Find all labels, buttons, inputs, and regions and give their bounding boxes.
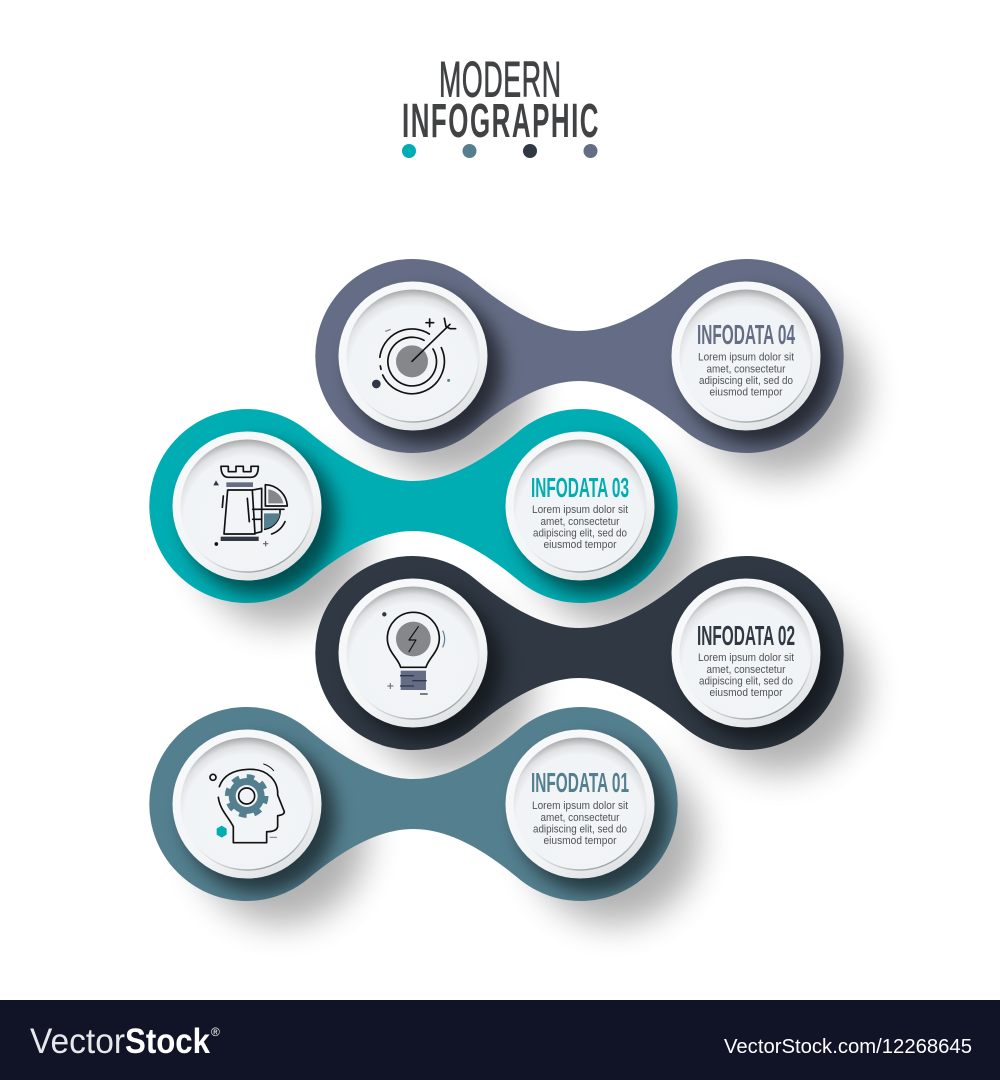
title: INFOGRAPHIC [402, 95, 600, 148]
panel: infodata 02 [315, 556, 844, 750]
text: infodata 04 [697, 319, 795, 398]
text: infodata 04: amet, consectetur [706, 364, 786, 376]
icon: chess rook and pie chart [213, 466, 287, 546]
band 04 [315, 259, 844, 453]
band 03 [149, 409, 678, 603]
left disc 01 [172, 730, 322, 878]
band 03 circle shadows [184, 443, 669, 595]
text: infodata 01 [531, 767, 629, 847]
footer logo: ® [211, 1025, 220, 1039]
text: infodata 03: amet, consectetur [540, 516, 620, 528]
title: MODERN [439, 53, 562, 108]
legend dots [402, 144, 598, 158]
text: infodata 04: Lorem ipsum dolor sit [698, 352, 794, 364]
left disc 03 [172, 432, 322, 580]
panel: infodata 03 [149, 409, 678, 603]
text: infodata 02 [697, 620, 795, 699]
left disc 04 [338, 282, 488, 430]
cast shadows on the background [195, 304, 866, 924]
icon: head with gear [210, 764, 284, 843]
right disc 04 [672, 282, 820, 430]
band 04 circle shadows [350, 293, 835, 445]
right disc 02 [672, 578, 820, 728]
band 02 circle shadows [350, 590, 835, 742]
text: infodata 04: INFODATA 04 [697, 319, 795, 350]
text: infodata 04: eiusmod tempor [710, 386, 783, 398]
text: infodata 03: eiusmod tempor [544, 539, 617, 551]
text: infodata 03: INFODATA 03 [531, 472, 629, 503]
text: infodata 03: Lorem ipsum dolor sit [532, 504, 628, 516]
footer logo [30, 1022, 220, 1061]
icon: target with arrow [372, 318, 456, 394]
right disc 03 [506, 432, 654, 580]
left disc 02 [338, 578, 488, 728]
footer logo: Vector [30, 1022, 125, 1061]
footer bar [0, 1000, 1000, 1080]
footer image id: VectorStock.com/12268645 [724, 1036, 972, 1058]
text: infodata 01: eiusmod tempor [544, 835, 617, 847]
text: infodata 02: INFODATA 02 [697, 620, 795, 651]
text: infodata 01: amet, consectetur [540, 812, 620, 824]
band 02 [315, 556, 844, 750]
text: infodata 01: Lorem ipsum dolor sit [532, 800, 628, 812]
icon: light bulb [382, 612, 445, 694]
text: infodata 02: eiusmod tempor [710, 687, 783, 699]
text: infodata 02: adipiscing elit, sed do [699, 676, 793, 688]
panel: infodata 04 [315, 259, 844, 453]
right disc 01 [506, 730, 654, 878]
text: infodata 02: amet, consectetur [706, 664, 786, 676]
text: infodata 01: adipiscing elit, sed do [533, 824, 627, 836]
panel: infodata 01 [149, 707, 678, 901]
text: infodata 03 [531, 472, 629, 551]
text: infodata 03: adipiscing elit, sed do [533, 528, 627, 540]
text: infodata 01: INFODATA 01 [531, 767, 629, 798]
title [402, 53, 600, 148]
band 01 [149, 707, 678, 901]
text: infodata 02: Lorem ipsum dolor sit [698, 652, 794, 664]
text: infodata 04: adipiscing elit, sed do [699, 375, 793, 387]
footer logo: Stock [125, 1022, 210, 1061]
band 01 circle shadows [184, 741, 669, 893]
